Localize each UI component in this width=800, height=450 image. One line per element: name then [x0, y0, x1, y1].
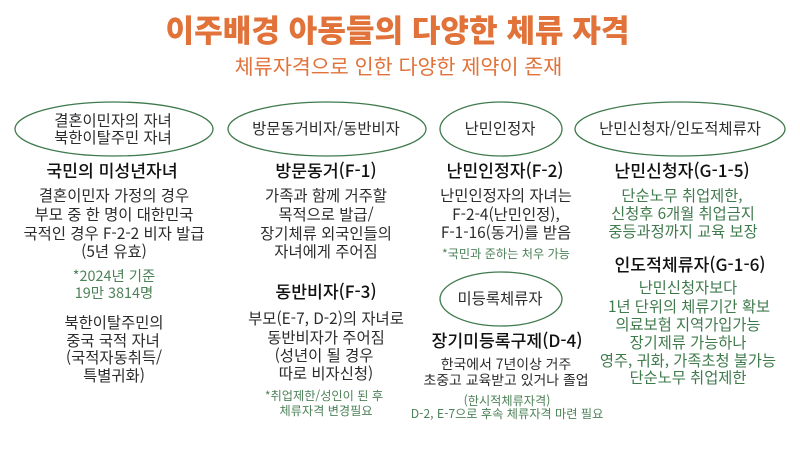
note: 2024 count: 19만 3814명 [75, 282, 153, 303]
note: 2024 count [73, 265, 155, 303]
panel: undocumented residents [411, 272, 603, 422]
text block: G-1-5 description: 신청후 6개월 취업금지 [611, 202, 755, 224]
text block: G-1-6 description [600, 276, 776, 388]
panel: children of marriage migrants and North Korean defectors [15, 102, 213, 386]
oval label: undocumented: 미등록체류자 [458, 287, 542, 309]
subtitle: 체류자격으로 인한 다양한 제약이 존재 [235, 50, 562, 80]
text block: G-1-5 description: 중등과정까지 교육 보장 [608, 220, 758, 242]
text block: G-1-5 description [608, 184, 758, 242]
oval label: marriage migrant and defector children: 결혼이민자의 자녀 [54, 109, 172, 131]
text block: D-4 description: 초중고 교육받고 있거나 졸업 [423, 370, 589, 390]
text block: G-1-6 description: 의료보험 지역가입가능 [615, 313, 761, 335]
heading: F-2: 난민인정자(F-2) [447, 157, 563, 182]
text block: F-3 description: 따로 비자신청) [279, 362, 373, 384]
text block: marriage migrant families: 국적인 경우 F-2-2 비자 발급 [24, 222, 204, 244]
note: follow-up status [411, 391, 603, 422]
oval label: refugees: 난민인정자 [465, 117, 535, 139]
heading: G-1-6: 인도적체류자(G-1-6) [614, 251, 766, 276]
heading: F-1: 방문동거(F-1) [275, 157, 377, 182]
text block: F-3 description: 동반비자가 주어짐 [267, 326, 385, 348]
text block: F-3 description: 부모(E-7, D-2)의 자녀로 [248, 307, 404, 329]
oval label: undocumented [440, 272, 562, 326]
text block: F-1 description: 장기체류 외국인들의 [260, 222, 392, 244]
text block: F-1 description: 목적으로 발급/ [278, 203, 374, 225]
text block: F-2 description: 난민인정자의 자녀는 [440, 184, 572, 206]
title: 이주배경 아동들의 다양한 체류 자격 [166, 6, 629, 51]
text block: marriage migrant families [24, 184, 204, 262]
text block: marriage migrant families: 결혼이민자 가정의 경우 [39, 184, 189, 206]
text block: defector children [64, 311, 164, 386]
text block: F-3 description: (성년이 될 경우 [275, 344, 373, 366]
heading: F-3: 동반비자(F-3) [275, 278, 377, 303]
note: 2024 count: *2024년 기준 [73, 265, 155, 286]
text block: G-1-5 description: 단순노무 취업제한, [621, 184, 743, 206]
text block: G-1-6 description: 단순노무 취업제한 [630, 366, 746, 388]
text block: marriage migrant families: 부모 중 한 명이 대한민국 [35, 203, 193, 225]
text block: F-1 description: 가족과 함께 거주할 [265, 184, 387, 206]
text block: F-1 description [260, 184, 392, 262]
panel: recognized refugees [440, 102, 572, 262]
note: F-3 restriction [265, 386, 383, 419]
oval label: asylum seekers and humanitarian stay: 난민신청자/인도적체류자 [599, 117, 761, 139]
text block: G-1-6 description: 영주, 귀화, 가족초청 불가능 [600, 349, 776, 371]
panel: asylum seekers and humanitarian status [575, 102, 785, 388]
panel: visit and dependent visas [228, 102, 426, 419]
note: F-3 restriction: *취업제한/성인이 된 후 [265, 386, 383, 404]
text block: D-4 description: 한국에서 7년이상 거주 [441, 354, 571, 374]
text block: defector children: 북한이탈주민의 [64, 311, 164, 333]
text block: defector children: 특별귀화) [83, 364, 145, 386]
note: follow-up status: D-2, E-7으로 후속 체류자격 마련 필요 [411, 404, 603, 422]
text block: F-2 description: F-2-4(난민인정), [452, 203, 560, 225]
oval label: visiting and dependent visa holders [228, 102, 426, 156]
text block: G-1-6 description: 난민신청자보다 [639, 276, 737, 298]
text block: marriage migrant families: (5년 유효) [81, 240, 147, 262]
text block: D-4 description [423, 354, 589, 390]
oval label: marriage migrant and defector children: 북한이탈주민 자녀 [54, 126, 172, 148]
text block: F-3 description [248, 307, 404, 384]
heading: G-1-5: 난민신청자(G-1-5) [614, 157, 750, 182]
text block: defector children: (국적자동취득/ [66, 346, 162, 368]
text block: F-2 description [440, 184, 572, 243]
heading: D-4: 장기미등록구제(D-4) [432, 327, 582, 352]
note: F-3 restriction: 체류자격 변경필요 [279, 401, 373, 419]
oval label: asylum seekers and humanitarian stay [575, 102, 785, 156]
text block: G-1-6 description: 1년 단위의 체류기간 확보 [608, 295, 770, 317]
note: follow-up status: (한시적체류자격) [464, 391, 550, 409]
oval label: visiting and dependent visa holders: 방문동거비자/동반비자 [252, 117, 400, 139]
text block: F-1 description: 자녀에게 주어짐 [274, 240, 378, 262]
text block: G-1-6 description: 장기제류 가능하나 [630, 331, 746, 353]
note: treatment: *국민과 준하는 처우 가능 [442, 244, 570, 262]
oval label: marriage migrant and defector children [15, 102, 213, 156]
text block: defector children: 중국 국적 자녀 [66, 329, 160, 351]
text block: F-2 description: F-1-16(동거)를 받음 [441, 221, 571, 243]
oval label: refugees [440, 102, 562, 156]
heading: minor children of citizens: 국민의 미성년자녀 [46, 157, 178, 182]
